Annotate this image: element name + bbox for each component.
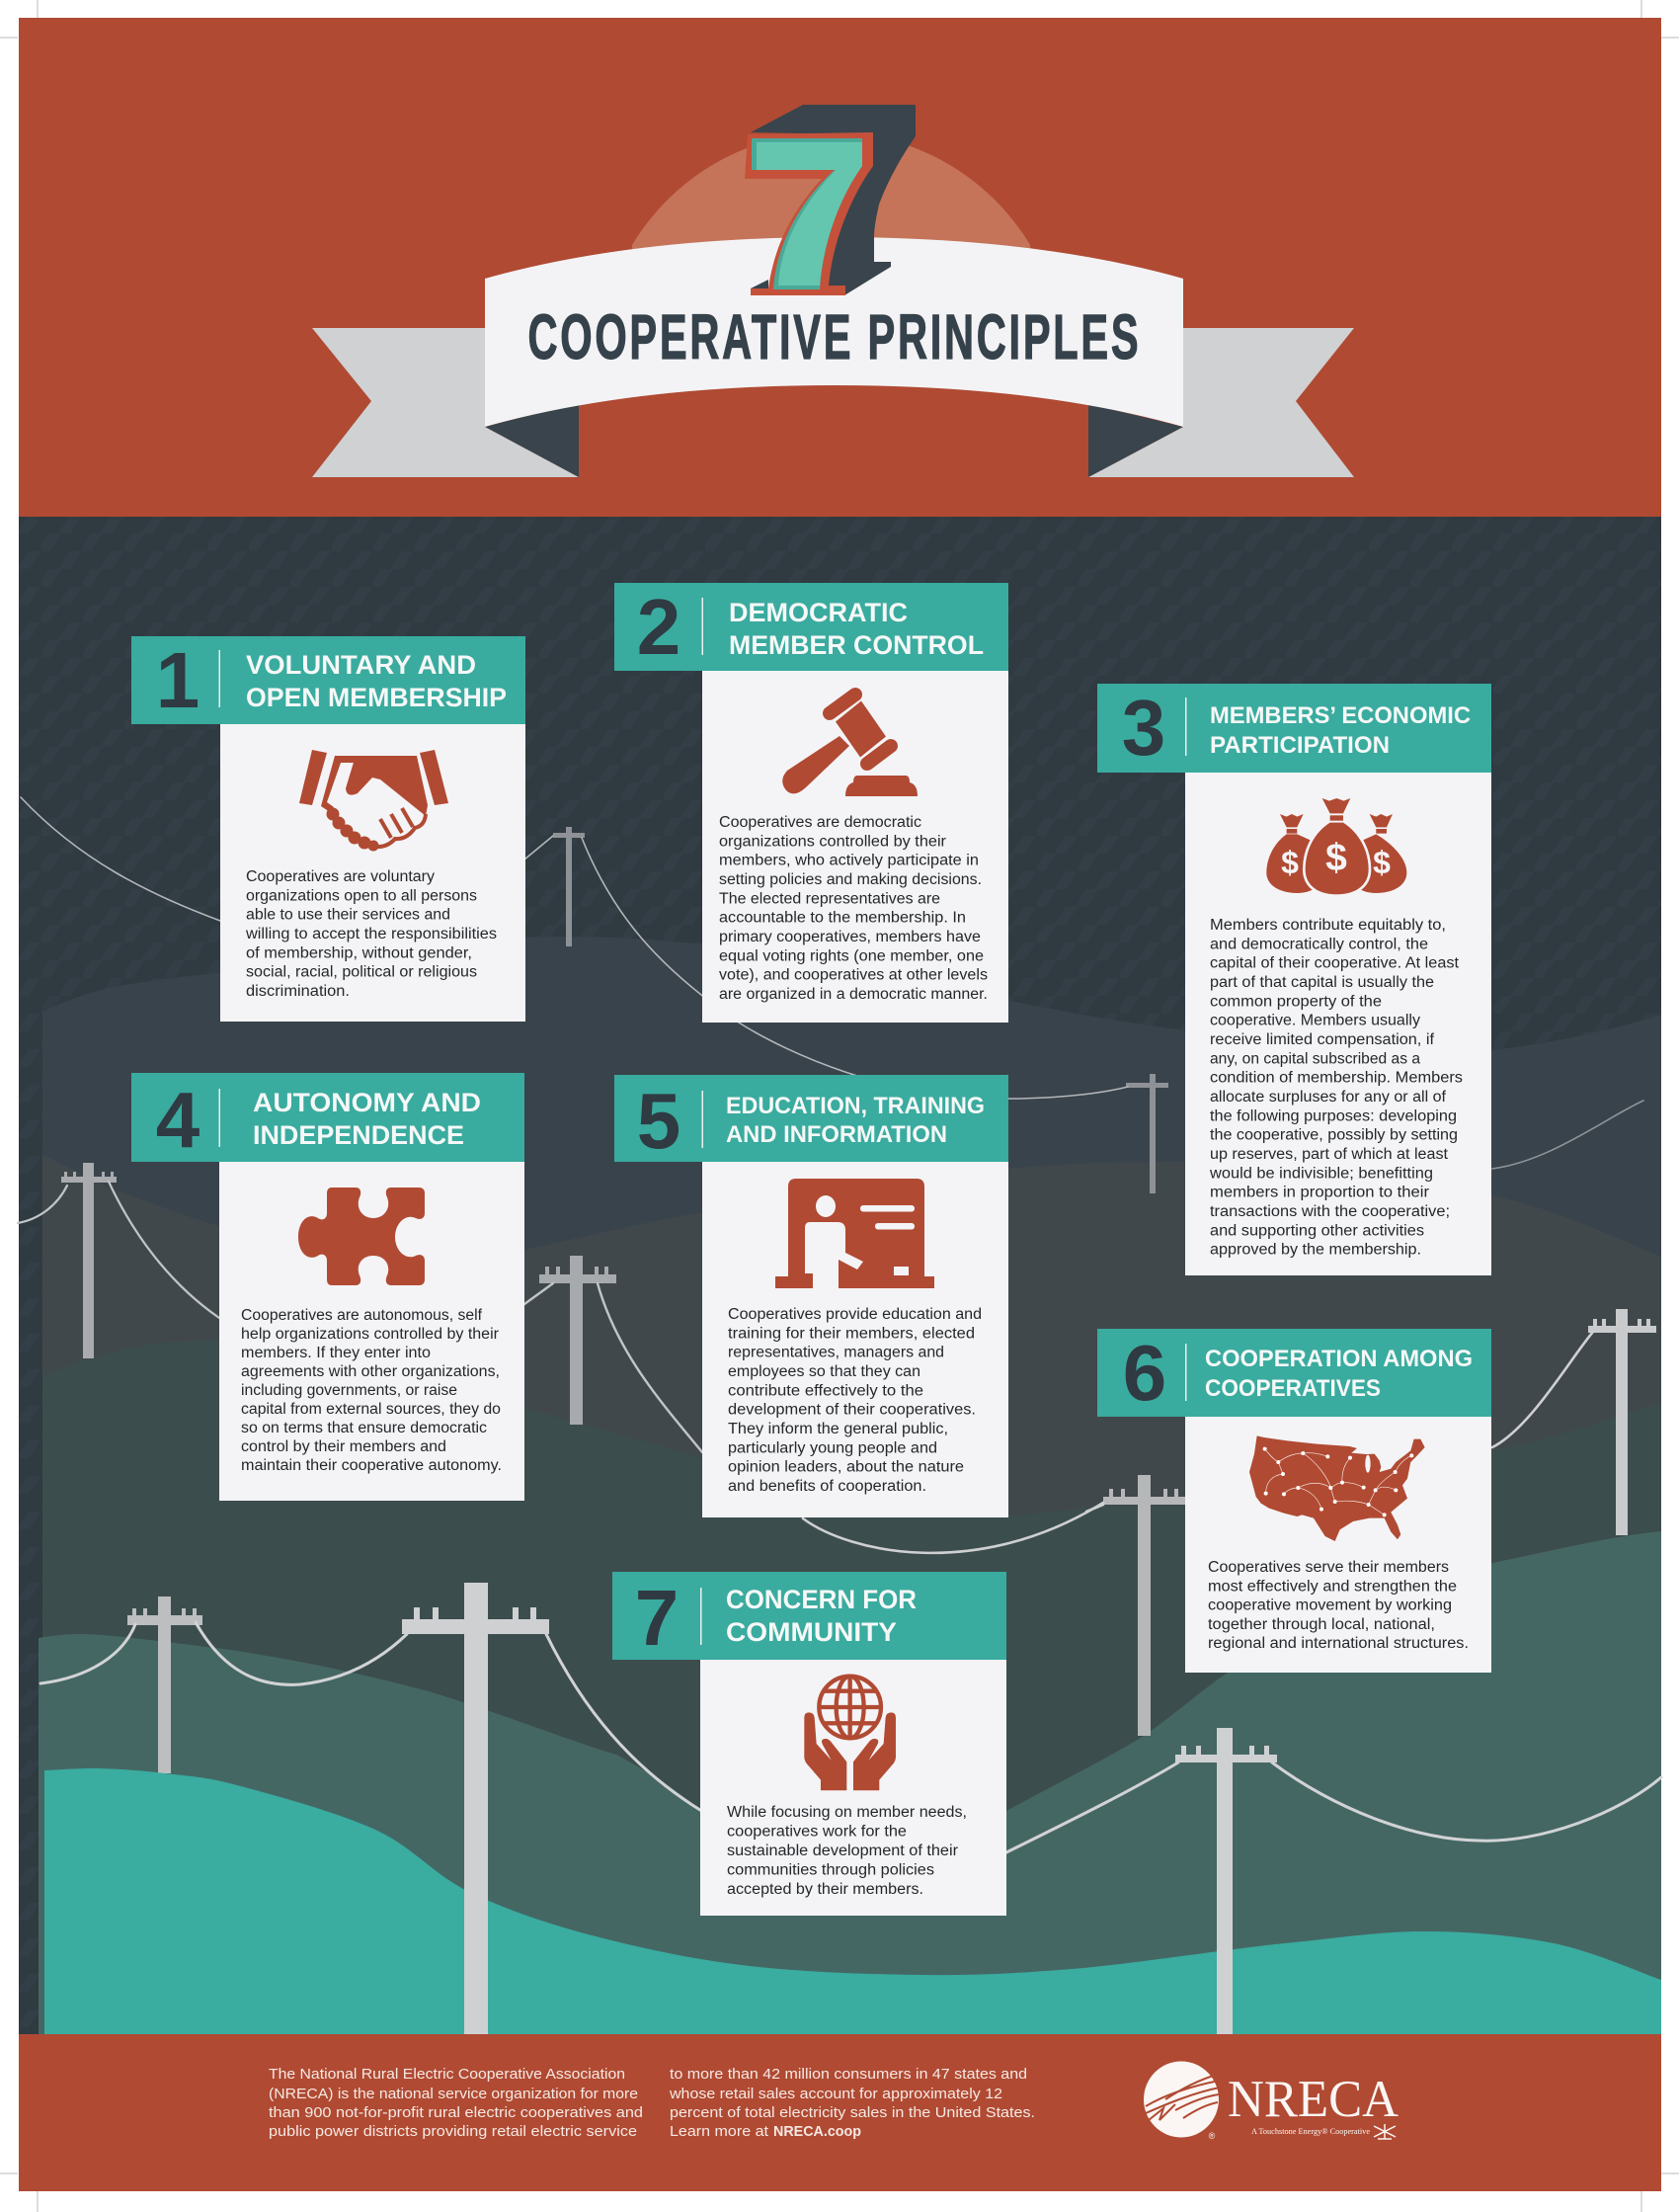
description: able to use their services and <box>246 907 450 924</box>
description: condition of membership. Members <box>1210 1070 1463 1087</box>
icon: centre money bag <box>1306 798 1369 894</box>
description: Cooperatives are democratic <box>719 814 921 831</box>
description: help organizations controlled by their <box>241 1326 499 1343</box>
heading <box>246 650 507 712</box>
description <box>1209 917 1463 1259</box>
description: organizations open to all persons <box>246 887 477 904</box>
panel: principle 5 <box>614 1075 1008 1517</box>
card body <box>1185 773 1491 1275</box>
card header <box>612 1572 1006 1660</box>
description: Cooperatives are voluntary <box>246 868 435 885</box>
description: allocate surpluses for any or all of <box>1210 1089 1447 1106</box>
description: representatives, managers and <box>728 1345 944 1361</box>
card body <box>220 724 525 1022</box>
heading: AUTONOMY AND <box>253 1088 481 1117</box>
card header <box>614 1075 1008 1162</box>
panel: principle 2 <box>614 583 1008 1023</box>
wires: overhead lines <box>18 797 1661 1852</box>
logo disc <box>1144 2061 1220 2138</box>
pole: mid right behind card six <box>1103 1475 1185 1736</box>
description: and benefits of cooperation. <box>728 1478 926 1495</box>
description: cooperatives work for the <box>727 1824 907 1840</box>
description: members. If they enter into <box>241 1345 431 1361</box>
footer text column 1 <box>269 2067 643 2140</box>
panel: title banner background <box>19 18 1661 517</box>
number 6: 6 <box>1123 1329 1166 1417</box>
description <box>728 1306 982 1495</box>
heading <box>1205 1346 1473 1402</box>
description: including governments, or raise <box>241 1382 457 1399</box>
footer text column 1: than 900 not-for-profit rural electric cooperatives and <box>269 2105 643 2121</box>
description: The elected representatives are <box>719 890 940 907</box>
card header <box>131 636 525 724</box>
panel: principle 1 <box>131 636 525 1022</box>
divider <box>701 1091 703 1148</box>
heading: AND INFORMATION <box>726 1121 947 1148</box>
description: would be indivisible; benefitting <box>1209 1165 1433 1182</box>
hill: front teal ridge <box>44 1768 1661 2035</box>
icon: USA network map <box>1249 1435 1425 1541</box>
description: members, who actively participate in <box>719 853 979 869</box>
panel: principle 4 <box>131 1073 524 1501</box>
description: maintain their cooperative autonomy. <box>241 1457 502 1474</box>
card body <box>700 1660 1006 1916</box>
pole: far right <box>1126 1074 1168 1193</box>
description <box>727 1804 967 1898</box>
card body <box>702 1162 1008 1517</box>
description: receive limited compensation, if <box>1210 1031 1435 1048</box>
footer text column 2 <box>669 2067 1035 2140</box>
sun <box>632 132 1030 267</box>
icon: hands holding globe <box>804 1677 896 1790</box>
description: opinion leaders, about the nature <box>728 1459 964 1476</box>
description: and supporting other activities <box>1210 1222 1424 1239</box>
footer text column 2: whose retail sales account for approximately 12 <box>669 2087 1002 2102</box>
description: equal voting rights (one member, one <box>719 947 984 964</box>
heading: DEMOCRATIC <box>729 598 908 627</box>
card header <box>1097 684 1491 773</box>
heading <box>729 598 984 660</box>
icon: side money bags <box>1266 814 1406 893</box>
description: development of their cooperatives. <box>728 1402 976 1419</box>
description: approved by the membership. <box>1210 1242 1421 1259</box>
card body <box>1185 1417 1491 1673</box>
number 7: 7 <box>635 1574 679 1662</box>
hill: second ridge <box>42 1155 1661 2035</box>
pole: far left of centre <box>553 827 585 946</box>
description: capital from external sources, they do <box>241 1401 501 1418</box>
footer text column 2: to more than 42 million consumers in 47 states and <box>670 2067 1027 2083</box>
icon: teacher at board <box>775 1179 934 1288</box>
description: While focusing on member needs, <box>727 1804 967 1821</box>
description: primary cooperatives, members have <box>719 929 981 945</box>
card header <box>131 1073 524 1162</box>
description: contribute effectively to the <box>728 1382 923 1399</box>
pole: centre-left medium <box>539 1256 616 1425</box>
logo wordmark: NRECA <box>1228 2071 1399 2128</box>
description <box>245 868 497 1000</box>
description: accepted by their members. <box>727 1881 923 1898</box>
icon: gavel <box>782 695 918 796</box>
card body <box>702 671 1008 1023</box>
number 4: 4 <box>156 1076 200 1164</box>
heading: EDUCATION, TRAINING <box>726 1093 985 1119</box>
description: setting policies and making decisions. <box>719 871 982 888</box>
heading: CONCERN FOR <box>726 1585 917 1614</box>
logo: NRECA <box>1144 2061 1399 2141</box>
description: capital of their cooperative. At least <box>1210 955 1460 972</box>
heading <box>1210 702 1471 759</box>
heading: COMMUNITY <box>726 1617 897 1647</box>
registered mark: ® <box>1209 2131 1216 2141</box>
description: accountable to the membership. In <box>719 910 966 927</box>
ribbon main <box>485 237 1183 427</box>
heading <box>726 1093 985 1148</box>
pole: big front right <box>1175 1728 1277 2035</box>
description: Cooperatives serve their members <box>1208 1559 1449 1576</box>
heading <box>726 1585 917 1647</box>
description: cooperative movement by working <box>1208 1597 1452 1614</box>
description: members in proportion to their <box>1210 1185 1429 1201</box>
dollar sign left: $ <box>1281 845 1299 880</box>
description: the following purposes: developing <box>1210 1107 1457 1124</box>
description: part of that capital is usually the <box>1210 974 1434 991</box>
panel: title graphic <box>312 105 1354 477</box>
divider <box>1185 1344 1187 1401</box>
description: Cooperatives provide education and <box>728 1306 982 1323</box>
description: together through local, national, <box>1208 1616 1435 1633</box>
icon: touchstone mark <box>1374 2124 1396 2139</box>
card header <box>614 583 1008 671</box>
card header <box>1097 1329 1491 1417</box>
big number seven <box>745 105 916 295</box>
heading: MEMBER CONTROL <box>729 630 984 660</box>
footer text column 2: percent of total electricity sales in the United States. <box>670 2105 1035 2121</box>
description: willing to accept the responsibilities <box>245 926 497 942</box>
ribbon left fold <box>485 404 579 477</box>
footer text column 1: public power districts providing retail electric service <box>269 2124 637 2140</box>
panel: principle 7 <box>612 1572 1006 1916</box>
icon: puzzle piece <box>298 1188 425 1285</box>
description: common property of the <box>1210 993 1382 1010</box>
heading: MEMBERS’ ECONOMIC <box>1210 702 1471 729</box>
heading <box>253 1088 481 1150</box>
heading: COOPERATIVES <box>1205 1375 1381 1402</box>
description: control by their members and <box>241 1438 446 1455</box>
heading: INDEPENDENCE <box>253 1120 464 1150</box>
pole: big front left <box>402 1583 549 2035</box>
panel: principle 3 <box>1097 684 1491 1275</box>
panel: principle 6 <box>1097 1329 1491 1673</box>
description: vote), and cooperatives at other levels <box>719 967 988 984</box>
footer text column 2: NRECA.coop <box>773 2124 861 2140</box>
number 3: 3 <box>1122 684 1165 772</box>
divider <box>219 650 220 707</box>
divider <box>219 1089 220 1147</box>
divider <box>1185 697 1187 756</box>
hill: far ridge <box>42 937 1661 2035</box>
number 1: 1 <box>156 636 200 724</box>
description: Cooperatives are autonomous, self <box>241 1307 483 1324</box>
description: organizations controlled by their <box>719 833 946 850</box>
description: and democratically control, the <box>1210 936 1428 952</box>
description: employees so that they can <box>728 1363 920 1380</box>
pole: lower left small <box>127 1597 202 1773</box>
footer text column 1: (NRECA) is the national service organization for more <box>269 2087 638 2102</box>
hill: fourth ridge <box>39 1531 1661 2035</box>
description: the cooperative, possibly by setting <box>1210 1127 1458 1144</box>
title text: COOPERATIVE PRINCIPLES <box>527 302 1139 372</box>
hill: third ridge <box>42 1341 1661 2035</box>
description: discrimination. <box>246 983 350 1000</box>
panel: footer <box>19 2034 1661 2191</box>
description: transactions with the cooperative; <box>1210 1203 1450 1220</box>
description <box>719 814 988 1003</box>
ribbon right tail <box>1088 328 1354 477</box>
description: most effectively and strengthen the <box>1208 1578 1457 1595</box>
description: sustainable development of their <box>727 1843 958 1859</box>
description: up reserves, part of which at least <box>1210 1146 1449 1163</box>
divider <box>701 598 703 655</box>
heading: VOLUNTARY AND <box>246 650 476 680</box>
description: regional and international structures. <box>1208 1635 1469 1652</box>
description: are organized in a democratic manner. <box>719 986 988 1003</box>
description: social, racial, political or religious <box>246 964 477 981</box>
description: cooperative. Members usually <box>1210 1013 1420 1029</box>
ribbon left tail <box>312 328 579 477</box>
card body <box>219 1162 524 1501</box>
description: training for their members, elected <box>728 1325 975 1342</box>
heading: COOPERATION AMONG <box>1205 1346 1473 1372</box>
description: agreements with other organizations, <box>241 1363 500 1380</box>
footer text column 2: Learn more at <box>670 2124 768 2140</box>
description: any, on capital subscribed as a <box>1210 1050 1420 1067</box>
heading: OPEN MEMBERSHIP <box>246 683 507 712</box>
ribbon right fold <box>1088 404 1183 477</box>
divider <box>700 1588 701 1645</box>
description: so on terms that ensure democratic <box>241 1420 487 1436</box>
description: particularly young people and <box>728 1439 937 1456</box>
pole: left medium <box>61 1163 117 1358</box>
description <box>1208 1559 1469 1652</box>
description <box>241 1307 502 1474</box>
logo tagline: A Touchstone Energy® Cooperative <box>1251 2126 1370 2136</box>
dollar sign centre: $ <box>1325 837 1347 879</box>
dollar sign right: $ <box>1373 845 1391 880</box>
description: of membership, without gender, <box>246 944 472 961</box>
panel: landscape background <box>18 517 1661 2035</box>
number 2: 2 <box>637 583 680 671</box>
pole: far right edge <box>1588 1309 1656 1535</box>
number 5: 5 <box>637 1077 680 1165</box>
description: Members contribute equitably to, <box>1210 917 1446 934</box>
footer text column 1: The National Rural Electric Cooperative Association <box>269 2067 625 2083</box>
description: They inform the general public, <box>728 1421 948 1437</box>
icon: handshake <box>299 750 448 852</box>
description: communities through policies <box>727 1861 934 1879</box>
heading: PARTICIPATION <box>1210 732 1390 759</box>
